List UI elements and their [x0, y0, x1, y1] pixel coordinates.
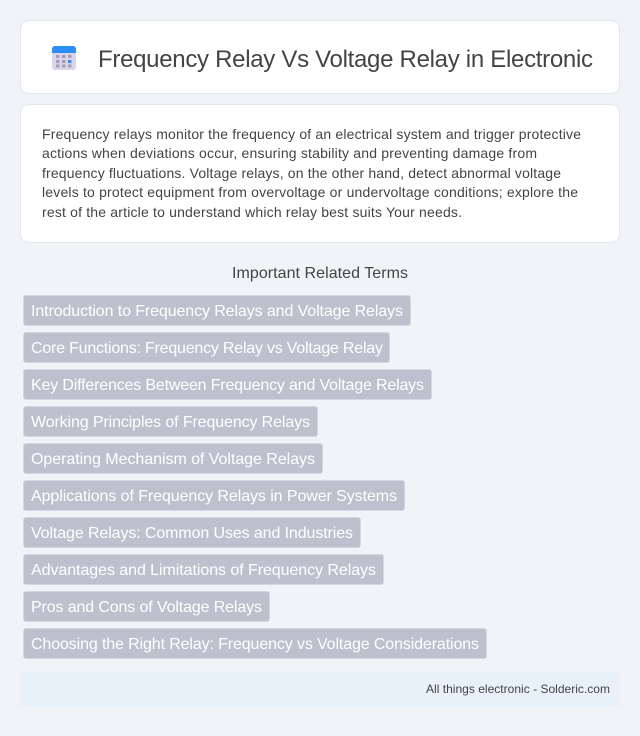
footer credit: All things electronic - Solderic.com	[426, 682, 610, 696]
tag 7	[24, 518, 360, 548]
intro paragraph: frequency fluctuations. Voltage relays, on the other hand, detect abnormal voltage	[42, 165, 561, 181]
icon: calendar grid	[52, 46, 76, 70]
tag 3: Key Differences Between Frequency and Voltage Relays	[31, 377, 424, 394]
header panel	[20, 20, 620, 94]
tag 6	[24, 480, 404, 510]
intro paragraph: actions when deviations occur, ensuring stability and preventing damage from	[42, 145, 537, 161]
tag 5: Operating Mechanism of Voltage Relays	[31, 451, 315, 468]
section heading: Important Related Terms	[232, 265, 408, 282]
intro paragraph: Frequency relays monitor the frequency of an electrical system and trigger protective	[42, 126, 581, 142]
tag 10	[24, 628, 486, 658]
tag 7: Voltage Relays: Common Uses and Industries	[31, 525, 353, 542]
tag 4	[24, 406, 318, 436]
tag 10: Choosing the Right Relay: Frequency vs Voltage Considerations	[31, 636, 479, 653]
title: Frequency Relay Vs Voltage Relay in Electronic	[98, 46, 593, 73]
intro paragraph	[42, 126, 581, 220]
tag 9	[24, 592, 270, 622]
tag 2	[24, 332, 390, 362]
tag 8	[24, 554, 384, 584]
tag 1	[24, 296, 410, 326]
footer bar	[20, 672, 620, 706]
intro paragraph: levels to protect equipment from overvoltage or undervoltage conditions; explore the	[42, 184, 578, 200]
intro panel	[20, 104, 620, 242]
tag 9: Pros and Cons of Voltage Relays	[31, 599, 262, 616]
tag 2: Core Functions: Frequency Relay vs Voltage Relay	[31, 340, 383, 357]
tag list	[24, 296, 486, 658]
intro paragraph: rest of the article to understand which relay best suits Your needs.	[42, 204, 462, 220]
tag 5	[24, 444, 322, 474]
tag 8: Advantages and Limitations of Frequency Relays	[31, 562, 376, 579]
tag 6: Applications of Frequency Relays in Power Systems	[31, 488, 397, 505]
tag 4: Working Principles of Frequency Relays	[31, 414, 310, 431]
tag 1: Introduction to Frequency Relays and Voltage Relays	[31, 303, 403, 320]
tag 3	[24, 370, 432, 400]
